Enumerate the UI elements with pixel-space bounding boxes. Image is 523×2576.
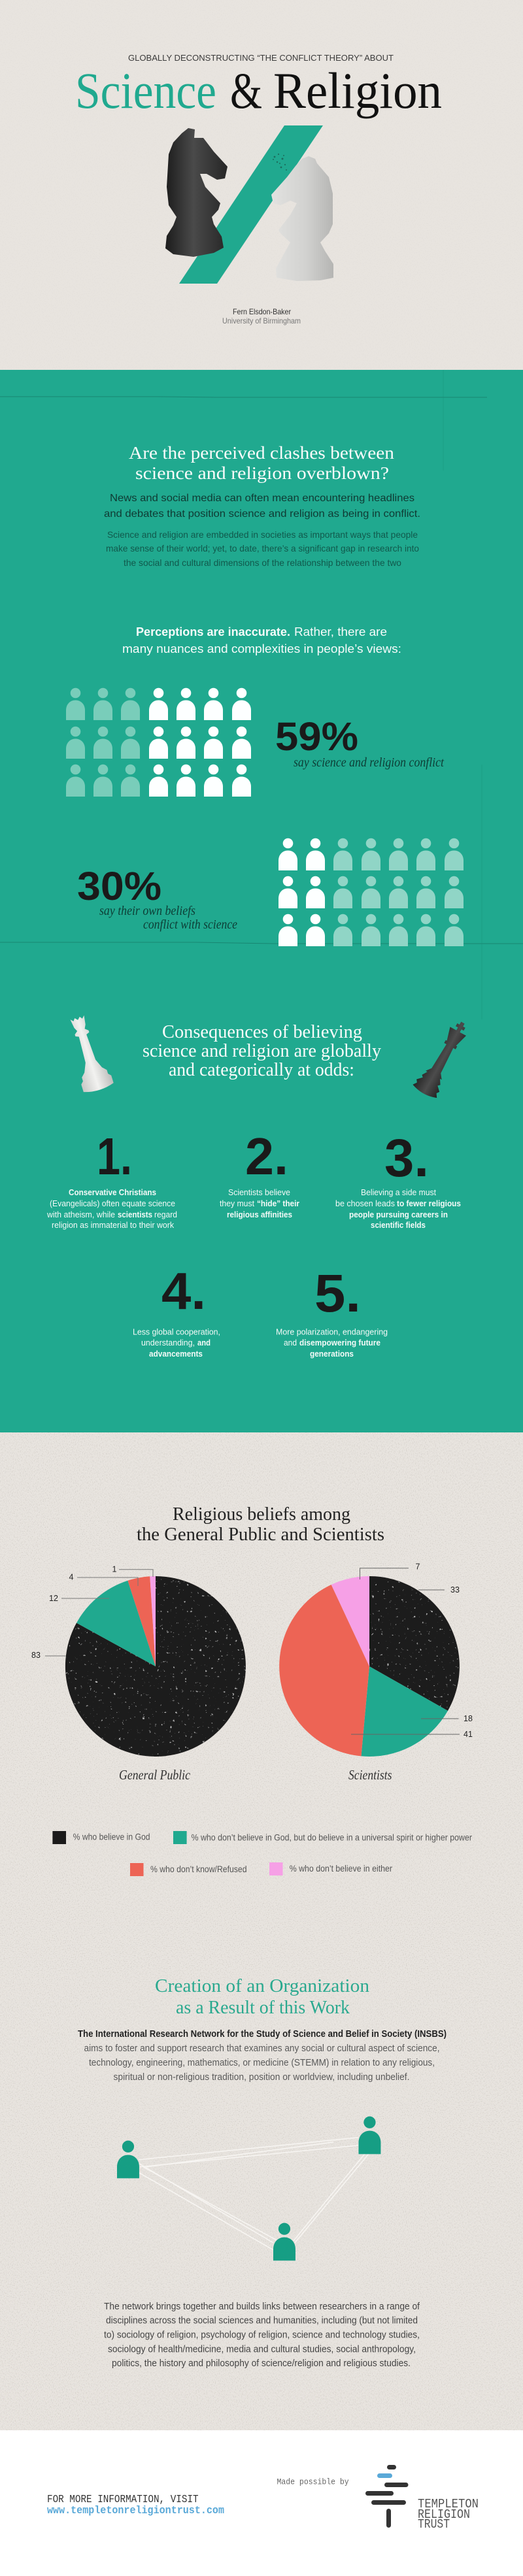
heading: religious beliefs (137, 1504, 384, 1545)
title: Science (75, 62, 216, 119)
consequence 5: More polarization, endangering (276, 1327, 388, 1337)
text block: news and social media (104, 493, 420, 520)
text block: perceptions are inaccurate: Rather, there are (294, 625, 387, 638)
icon: black king (412, 1016, 475, 1100)
text block: INSBS description (78, 2029, 447, 2083)
pie chart: scientists (279, 1562, 473, 1757)
consequence 5 (276, 1264, 388, 1359)
text block: INSBS description: The International Research Network for the Study of Science and Belief in Society (INSBS) (78, 2029, 447, 2039)
consequence 3 (335, 1129, 461, 1230)
consequence 4: advancements (149, 1349, 203, 1359)
consequence 1: Conservative Christians (69, 1187, 156, 1197)
stat: 59 percent: say science and religion conflict (294, 755, 444, 770)
text block: network disciplines: disciplines across the social sciences and humanities, including (but not limited (106, 2315, 418, 2326)
heading: consequences: science and religion are globally (143, 1041, 381, 1061)
legend: % who believe in God (73, 1832, 150, 1842)
pie chart: scientists: 41 (464, 1730, 473, 1739)
consequence 1: with atheism, while (46, 1210, 115, 1219)
author (222, 307, 301, 325)
legend: % who don’t know/Refused (150, 1864, 247, 1874)
logo: templeton religion trust: TEMPLETON (418, 2497, 479, 2511)
text block: network disciplines (104, 2301, 420, 2369)
stat: 30 percent: say their own beliefs (99, 904, 195, 918)
consequence 3: scientific fields (371, 1220, 426, 1230)
text block: network disciplines: The network brings together and builds links between researchers in a range of (104, 2301, 420, 2312)
logo: templeton religion trust: TRUST (418, 2517, 450, 2532)
logo: templeton religion trust: RELIGION (418, 2507, 470, 2522)
heading: consequences (143, 1022, 381, 1080)
consequence 1: scientists (118, 1210, 152, 1219)
panel: header (75, 53, 442, 325)
text block: perceptions are inaccurate: many nuances and complexities in people’s views: (122, 642, 401, 655)
panel: teal section (0, 370, 523, 1432)
consequence 4: and (197, 1338, 211, 1347)
consequence 5: 5. (314, 1264, 361, 1323)
text block: research gap: make sense of their world; yet, to date, there’s a significant gap in research into (106, 543, 419, 553)
heading: religious beliefs: the General Public and Scientists (137, 1525, 384, 1545)
pictogram: 59 percent (66, 688, 251, 797)
caption: general public: General Public (119, 1767, 191, 1783)
stat: 59 percent (275, 714, 444, 770)
consequence 1: 1. (97, 1127, 132, 1185)
heading: creation of an organization: Creation of an Organization (155, 1975, 370, 1996)
panel: religious beliefs (31, 1504, 473, 1876)
pie chart: scientists: 7 (416, 1562, 420, 1572)
consequence 5: disempowering future (299, 1338, 380, 1347)
heading: overblown question: science and religion overblown? (135, 463, 389, 483)
icon: black knight (165, 128, 228, 257)
diagram: network of people (117, 2117, 380, 2260)
consequence 1: regard (154, 1210, 177, 1219)
text block: more information (47, 2494, 224, 2517)
pictogram: 30 percent (278, 838, 464, 946)
panel: footer (0, 2430, 523, 2576)
consequence 4: 4. (161, 1262, 206, 1320)
author: Fern Elsdon-Baker (233, 307, 291, 316)
logo: templeton religion trust (365, 2465, 479, 2532)
heading: overblown question: Are the perceived clashes between (129, 443, 395, 463)
pie chart: general public: 12 (49, 1594, 58, 1603)
heading: consequences: Consequences of believing (162, 1022, 362, 1042)
text block: INSBS description: aims to foster and support research that examines any social or cultural aspect of science, (84, 2043, 439, 2054)
text block: perceptions are inaccurate (122, 625, 401, 655)
caption: scientists: Scientists (348, 1767, 392, 1783)
heading: overblown question (129, 443, 395, 483)
stat: 59 percent: 59% (275, 714, 358, 759)
consequence 3: people pursuing careers in (349, 1210, 448, 1219)
consequence 1: religion as immaterial to their work (52, 1220, 174, 1230)
consequence 4: Less global cooperation, (133, 1327, 220, 1337)
consequence 3: Believing a side must (361, 1187, 436, 1197)
stat: 30 percent: 30% (77, 864, 161, 908)
consequence 2: 2. (245, 1127, 288, 1185)
text block: research gap: Science and religion are embedded in societies as important ways that people (107, 529, 418, 540)
text block: news and social media: News and social media can often mean encountering headlines (110, 493, 414, 504)
consequence 4: understanding, (141, 1338, 195, 1347)
heading: creation of an organization: as a Result of this Work (176, 1997, 350, 2018)
legend (52, 1831, 472, 1876)
consequence 3: 3. (384, 1129, 429, 1188)
text block: network disciplines: sociology of health/medicine, media and cultural studies, social anthropology, (108, 2344, 416, 2355)
heading: creation of an organization (155, 1975, 370, 2018)
consequence 3: be chosen leads (335, 1198, 395, 1208)
consequence 3: to fewer religious (397, 1198, 461, 1208)
consequence 2: religious affinities (227, 1210, 292, 1219)
title: Religion (273, 62, 442, 119)
subtitle: GLOBALLY DECONSTRUCTING “THE CONFLICT THEORY” ABOUT (128, 53, 394, 63)
text block: INSBS description: technology, engineering, mathematics, or medicine (STEMM) in relation to any religious, (89, 2058, 435, 2068)
consequence 2: “hide” their (257, 1198, 299, 1208)
legend: % who don’t believe in either (290, 1864, 392, 1874)
legend: % who don’t believe in God, but do believe in a universal spirit or higher power (191, 1833, 472, 1843)
consequence 4 (133, 1262, 220, 1359)
title (75, 62, 442, 119)
pie chart: general public: 83 (31, 1651, 41, 1660)
pie chart: scientists: 18 (464, 1714, 473, 1723)
consequence 2: they must (220, 1198, 254, 1208)
text block: network disciplines: to) sociology of religion, psychology of religion, science and technology studies, (104, 2330, 420, 2341)
text: made possible by: Made possible by (277, 2477, 349, 2487)
stat: 30 percent: conflict with science (143, 917, 237, 932)
icon: teal slash (179, 125, 323, 284)
text block: network disciplines: politics, the history and philosophy of science/religion and religious studies. (112, 2358, 411, 2369)
consequence 5: generations (310, 1349, 354, 1359)
text block: research gap: the social and cultural dimensions of the relationship between the two (124, 557, 401, 568)
stat: 30 percent (77, 864, 237, 932)
consequence 5: and (284, 1338, 297, 1347)
consequence 1: (Evangelicals) often equate science (50, 1198, 175, 1208)
text block: INSBS description: spiritual or non-religious tradition, position or worldview, including unbelief. (114, 2072, 409, 2083)
pie chart: general public: 4 (69, 1572, 74, 1581)
pie chart: general public: 1 (112, 1565, 117, 1574)
text block: more information: FOR MORE INFORMATION, VISIT (47, 2494, 199, 2506)
title: & (230, 62, 262, 119)
panel: creation of an organization (78, 1975, 447, 2369)
text block: news and social media: and debates that position science and religion as being in conflict. (104, 508, 420, 520)
pie chart: scientists: 33 (450, 1585, 460, 1594)
text block: perceptions are inaccurate: Perceptions are inaccurate. (136, 625, 290, 638)
text block: research gap (106, 529, 419, 568)
consequence 1 (46, 1127, 177, 1230)
pie chart: general public (31, 1565, 246, 1757)
author: University of Birmingham (222, 316, 301, 325)
heading: religious beliefs: Religious beliefs among (173, 1504, 350, 1525)
icon: white queen (62, 1013, 114, 1095)
text block: more information: www.templetonreligiontrust.com (47, 2504, 224, 2517)
icon: white knight (271, 156, 333, 281)
consequence 2: Scientists believe (228, 1187, 290, 1197)
heading: consequences: and categorically at odds: (169, 1060, 354, 1080)
consequence 2 (220, 1127, 299, 1219)
